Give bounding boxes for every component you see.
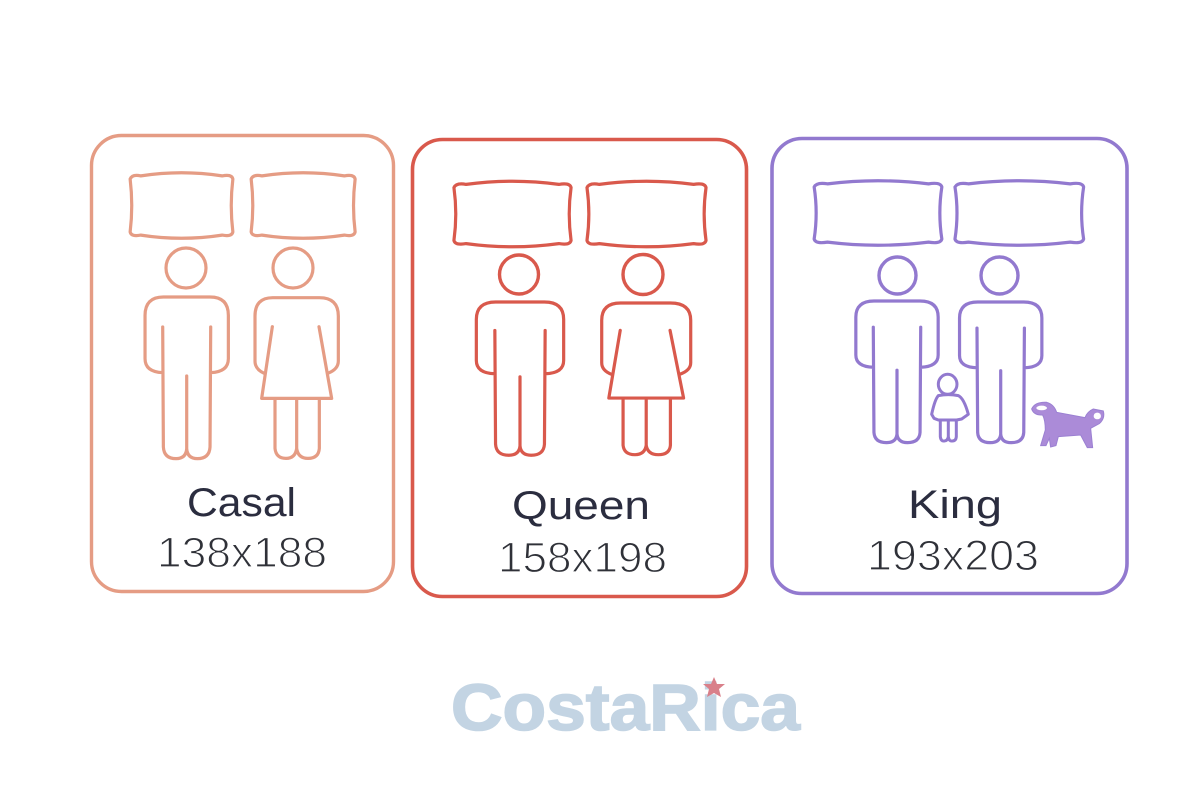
panel outline: King [772,138,1127,594]
label: Queen: Queen [512,484,650,528]
icon: star [703,677,725,697]
dimensions: Casal: 138x188 [157,529,327,577]
panel: King [772,138,1127,594]
icon: child [932,374,968,441]
icon: Casal pillows [130,173,355,238]
icon: Queen woman [602,254,691,455]
panel outline: Casal [92,136,394,592]
label: Casal: Casal [187,481,296,525]
label: King: King [908,483,1002,527]
icon: King adult left [856,257,938,443]
icon: dog [1032,402,1104,448]
icon: King adult right [960,257,1042,443]
icon: King pillows [814,181,1084,245]
panel outline: Queen [412,140,746,596]
panel: Casal [92,136,394,592]
dimensions: Queen: 158x198 [498,534,667,582]
icon: Casal man [145,248,228,459]
logo wordmark: CostaRica [451,670,801,744]
icon: Queen man [476,255,564,455]
icon: Queen pillows [454,181,706,247]
panel: Queen [412,140,746,596]
logo: CostaRica [451,670,801,744]
dimensions: King: 193x203 [867,532,1039,580]
icon: Casal woman [255,248,338,458]
